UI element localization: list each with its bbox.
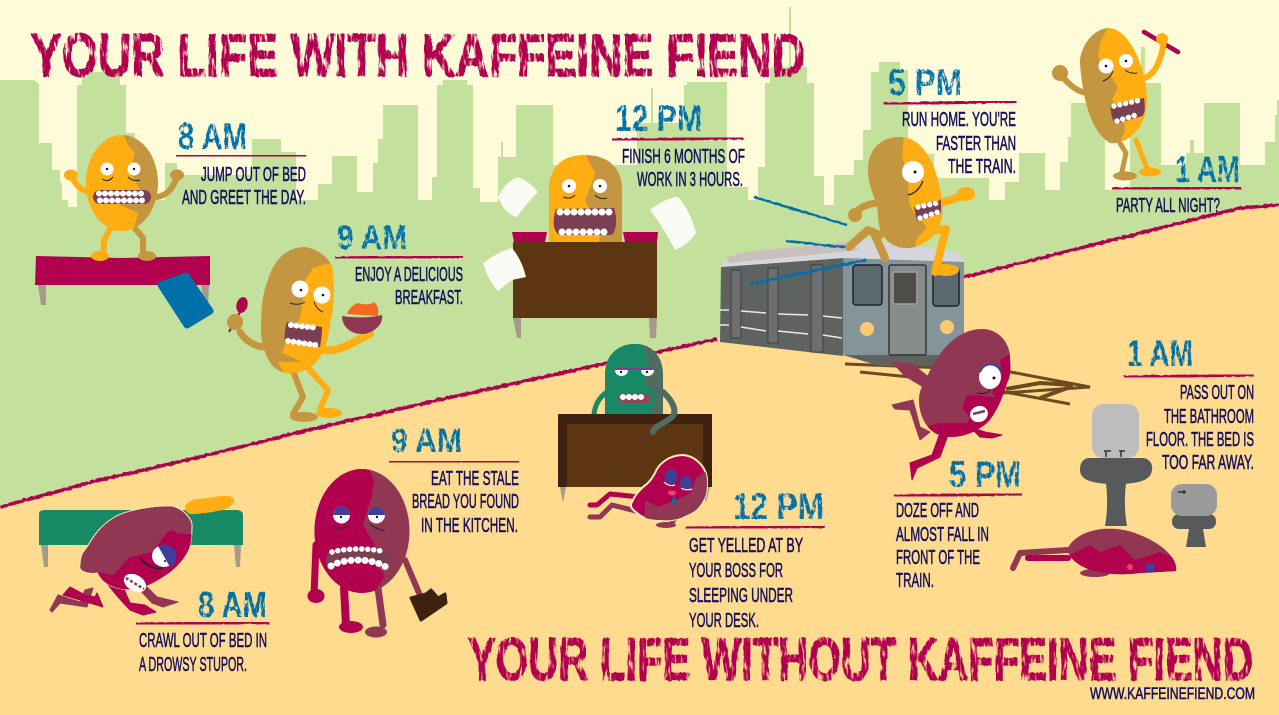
boss desk <box>558 392 712 503</box>
time label: 8 am: 8 AM <box>198 584 267 625</box>
caption: run home: FASTER THAN <box>936 133 1016 155</box>
time label: 9 am: 9 AM <box>391 422 462 460</box>
caption: stale bread: EAT THE STALE <box>431 468 519 490</box>
rule <box>176 154 306 158</box>
panel: 8 am with <box>35 116 306 325</box>
panel: 12 pm with <box>483 98 745 338</box>
caption: yelled at <box>689 535 803 632</box>
panel: 12 pm without <box>558 340 825 632</box>
character: sleeping under desk <box>590 455 710 528</box>
train <box>720 239 964 366</box>
caption: run home <box>902 109 1016 178</box>
panel: 5 pm with <box>750 62 1016 284</box>
caption: doze off: TRAIN. <box>896 570 934 592</box>
time label: 8 am: 8 AM <box>178 116 247 157</box>
panel: 9 am without <box>308 422 519 638</box>
caption: yelled at: SLEEPING UNDER <box>689 585 793 607</box>
caption: run home: THE TRAIN. <box>948 156 1016 178</box>
time label: 1 am: 1 AM <box>1127 333 1193 374</box>
desk and chair <box>512 232 658 338</box>
rule <box>686 526 825 528</box>
rule <box>389 460 519 464</box>
caption: doze off <box>896 500 989 592</box>
caption: breakfast: ENJOY A DELICIOUS <box>355 264 463 286</box>
rule <box>612 138 743 140</box>
caption: breakfast: BREAKFAST. <box>395 287 463 309</box>
panel: 1 am without <box>1013 333 1254 578</box>
caption: yelled at: YOUR DESK. <box>689 610 759 632</box>
caption: breakfast <box>355 264 463 309</box>
caption: stale bread: BREAD YOU FOUND <box>412 491 519 513</box>
orange ground <box>0 206 1279 715</box>
caption: yelled at: GET YELLED AT BY <box>689 535 803 557</box>
character: running <box>848 135 975 276</box>
caption: finish work: WORK IN 3 HOURS. <box>637 169 743 191</box>
character: holding stale bread <box>308 465 419 638</box>
bowl of food <box>342 302 382 334</box>
panel: 9 am with <box>227 219 463 422</box>
pillow <box>161 276 210 325</box>
time label: 9 am: 9 AM <box>337 219 407 257</box>
toilet <box>1171 484 1217 547</box>
caption: crawl <box>139 630 267 676</box>
bed <box>35 256 210 305</box>
time label: 12 pm: 12 PM <box>733 486 824 527</box>
caption: stale bread <box>412 468 519 537</box>
flying papers <box>483 177 696 291</box>
time label: 5 pm: 5 PM <box>888 62 962 103</box>
character: jumping <box>64 130 184 261</box>
character: at desk <box>549 155 622 242</box>
rule <box>894 494 1022 496</box>
character: dozing near train <box>892 329 1015 480</box>
time label: 5 pm: 5 PM <box>949 454 1021 495</box>
character: passed out <box>1013 529 1178 578</box>
character: boss <box>594 340 663 415</box>
rule <box>884 102 1016 104</box>
rule <box>1124 375 1254 377</box>
panel: 5 pm without <box>892 329 1022 592</box>
caption: crawl: A DROWSY STUPOR. <box>139 654 247 676</box>
caption: crawl: CRAWL OUT OF BED IN <box>139 630 267 652</box>
caption: jump out of bed: JUMP OUT OF BED <box>201 164 306 186</box>
yellow blob <box>185 496 234 514</box>
character: eating breakfast <box>227 247 370 422</box>
caption: run home: RUN HOME. YOU'RE <box>902 109 1016 131</box>
caption: doze off: ALMOST FALL IN <box>896 524 989 546</box>
caption: finish work <box>622 146 745 191</box>
time label: 12 pm: 12 PM <box>615 98 702 139</box>
character: partying <box>1052 25 1178 180</box>
railway tracks <box>845 364 1090 404</box>
stale bread <box>411 590 446 620</box>
panel: 8 am without <box>39 496 269 676</box>
ground divider line <box>0 205 1279 507</box>
caption: yelled at: YOUR BOSS FOR <box>689 560 783 582</box>
rule <box>335 256 463 258</box>
panel: 1 am with <box>1052 25 1241 217</box>
rule <box>136 622 269 624</box>
title: your life with: YOUR LIFE WITH KAFFEINE FIEND <box>31 22 805 89</box>
caption: pass out <box>1146 382 1254 474</box>
rule <box>1112 188 1241 189</box>
caption: doze off: FRONT OF THE <box>896 547 980 569</box>
character: crawling <box>50 506 195 615</box>
caption: jump out of bed: AND GREET THE DAY. <box>182 187 306 209</box>
caption: doze off: DOZE OFF AND <box>896 500 979 522</box>
caption: finish work: FINISH 6 MONTHS OF <box>622 146 745 168</box>
caption: jump out of bed <box>182 164 306 209</box>
time label: 1 am: 1 AM <box>1175 149 1240 190</box>
caption: stale bread: IN THE KITCHEN. <box>421 515 518 537</box>
bench <box>39 510 243 567</box>
bathroom sink <box>1080 404 1152 526</box>
speed lines <box>750 197 866 284</box>
